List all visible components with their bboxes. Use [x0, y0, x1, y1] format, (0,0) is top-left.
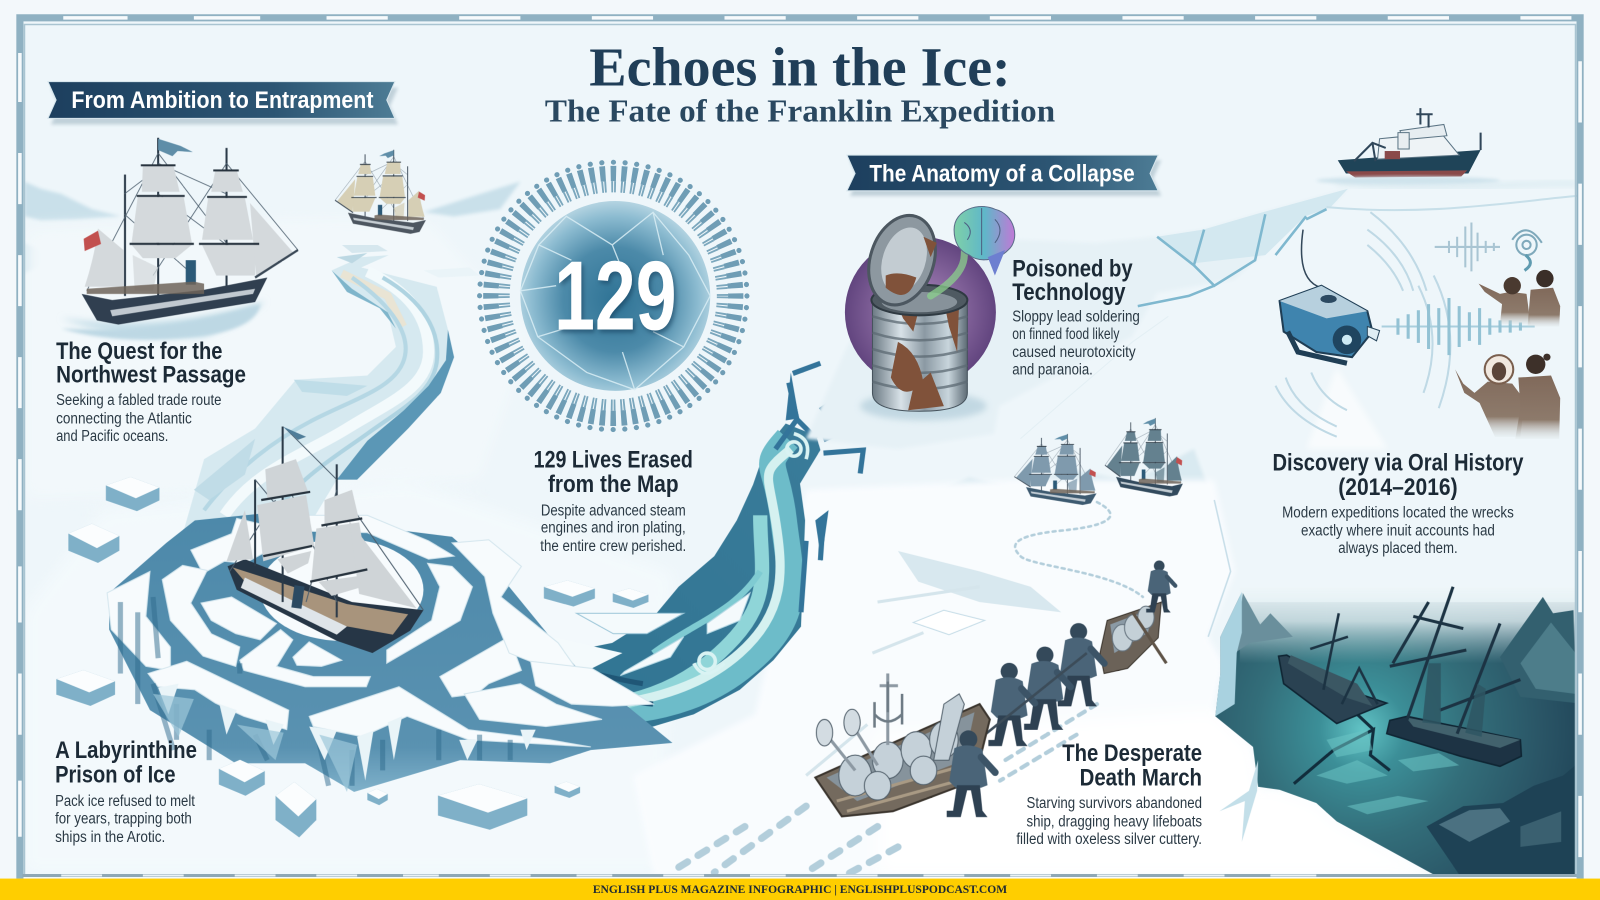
text block: A Labyrinthine Prison of Ice: Pack ice refused to melt	[55, 793, 195, 810]
ice block tops	[107, 515, 653, 747]
text block: Poisoned by Technology: Technology	[1012, 279, 1126, 306]
wreck: Terror	[1387, 587, 1521, 766]
text block: 129 Lives Erased: Despite advanced steam	[541, 502, 686, 519]
text block: The Desperate Death March: Death March	[1080, 765, 1202, 792]
icon: ring of 129 crew silhouettes	[480, 162, 747, 430]
text block: The Desperate Death March: Starving survivors abandoned	[1027, 795, 1202, 812]
distant icebergs	[24, 182, 1214, 505]
footer bar: ENGLISH PLUS MAGAZINE INFOGRAPHIC | ENGLISHPLUSPODCAST.COM	[593, 883, 1007, 896]
icon: purple medallion	[845, 237, 996, 388]
text block: 129 Lives Erased: 129 Lives Erased	[534, 446, 693, 473]
title	[545, 37, 1056, 128]
text block: A Labyrinthine Prison of Ice: Prison of Ice	[55, 762, 176, 789]
icon: rusted tin can with fumes and brain	[858, 206, 1015, 420]
text block: A Labyrinthine Prison of Ice: ships in the Arotic.	[55, 829, 165, 846]
text block: Discovery via Oral History: (2014–2016)	[1338, 474, 1458, 501]
text block: Discovery via Oral History: Modern expeditions located the wrecks	[1282, 504, 1514, 521]
text block: Poisoned by Technology: Poisoned by	[1012, 256, 1133, 283]
fissures	[776, 363, 877, 612]
sea floor cracks	[1294, 714, 1390, 784]
text block: A Labyrinthine Prison of Ice: for years, trapping both	[55, 810, 192, 827]
text block: Poisoned by Technology: and paranoia.	[1012, 361, 1093, 378]
ship: HMS Erebus	[61, 138, 298, 340]
text block: Discovery via Oral History: exactly where inuit accounts had	[1301, 523, 1495, 540]
text block: Poisoned by Technology	[1012, 256, 1140, 378]
text block: The Quest for the Northwest Passage: Seeking a fabled trade route	[56, 392, 222, 409]
text block: Discovery via Oral History	[1272, 449, 1524, 557]
icon: Inuit witnesses, upper pair	[1479, 270, 1560, 327]
ice floe: labyrinth prison	[56, 477, 672, 837]
icon: ice sphere with 129	[520, 201, 710, 391]
icon: oral history symbol	[1512, 230, 1542, 270]
ship: trapped in pack ice	[227, 427, 423, 653]
cliff edge	[1215, 592, 1242, 716]
text block: The Desperate Death March: filled with oxeless silver cuttery.	[1016, 831, 1202, 848]
text block: Poisoned by Technology: caused neurotoxicity	[1012, 344, 1136, 361]
text block: The Quest for the Northwest Passage: connecting the Atlantic	[56, 410, 192, 427]
text block: The Quest for the Northwest Passage: and Pacific oceans.	[56, 428, 168, 445]
swirls	[694, 434, 808, 673]
footprints trail	[679, 502, 1143, 874]
icon: ROV submersible	[1280, 230, 1388, 449]
banner: From Ambition to Entrapment	[48, 82, 398, 124]
footer bar	[0, 879, 1600, 900]
ship: distant ship	[335, 150, 426, 234]
title: Echoes in the Ice:	[589, 37, 1011, 98]
panel: wreck seabed	[1215, 587, 1577, 874]
ships: abandoned Erebus and Terror on the ice	[1014, 418, 1183, 505]
central pool of white ice	[260, 539, 423, 641]
icon: ice sphere with 129: 129	[554, 241, 677, 351]
icon: Inuit witnesses, lower pair	[1455, 354, 1560, 439]
text block: The Desperate Death March: ship, dragging heavy lifeboats	[1027, 814, 1202, 831]
open pack ice	[24, 218, 531, 500]
ice floes in the stream	[531, 593, 750, 676]
text block: The Quest for the Northwest Passage: The Quest for the	[56, 338, 222, 365]
banner: The Anatomy of a Collapse	[847, 155, 1161, 196]
icon: lifeboat hauling party	[815, 560, 1175, 817]
text block: The Desperate Death March	[1016, 740, 1202, 848]
text block: A Labyrinthine Prison of Ice	[55, 737, 197, 846]
frozen passage path	[184, 245, 480, 531]
banner: From Ambition to Entrapment: From Ambition to Entrapment	[71, 87, 373, 114]
text block: The Quest for the Northwest Passage: Northwest Passage	[56, 362, 246, 389]
rocky shores	[1235, 593, 1576, 874]
banner: The Anatomy of a Collapse: The Anatomy of a Collapse	[869, 161, 1135, 188]
text block: The Quest for the Northwest Passage	[56, 338, 246, 445]
small ice blocks	[56, 477, 648, 837]
title: The Fate of the Franklin Expedition	[545, 93, 1056, 128]
icicles	[158, 684, 536, 781]
chart: sonar arcs and sound waves	[1276, 212, 1535, 437]
text block: The Desperate Death March: The Desperate	[1062, 740, 1202, 767]
text block: 129 Lives Erased: from the Map	[548, 471, 679, 498]
plain: white ice sheet lower center	[633, 480, 1434, 874]
text block: 129 Lives Erased: the entire crew perished.	[540, 538, 686, 555]
text block: Poisoned by Technology: Sloppy lead soldering	[1012, 308, 1140, 325]
text block: Discovery via Oral History: always placed them.	[1338, 540, 1458, 557]
text block: Poisoned by Technology: on finned food likely	[1012, 326, 1119, 343]
dark channel shadows	[120, 597, 510, 786]
text block: A Labyrinthine Prison of Ice: A Labyrinthine	[55, 737, 197, 764]
stream: fractured blue water	[480, 363, 877, 753]
text block: 129 Lives Erased: engines and iron plating,	[541, 520, 686, 537]
wreck: Erebus	[1279, 613, 1387, 723]
text block: 129 Lives Erased	[534, 446, 693, 555]
text block: Discovery via Oral History: Discovery via Oral History	[1272, 449, 1524, 476]
ship: modern research vessel	[1316, 108, 1500, 185]
floe: poison pedestal and cracked ridge	[806, 182, 1577, 449]
